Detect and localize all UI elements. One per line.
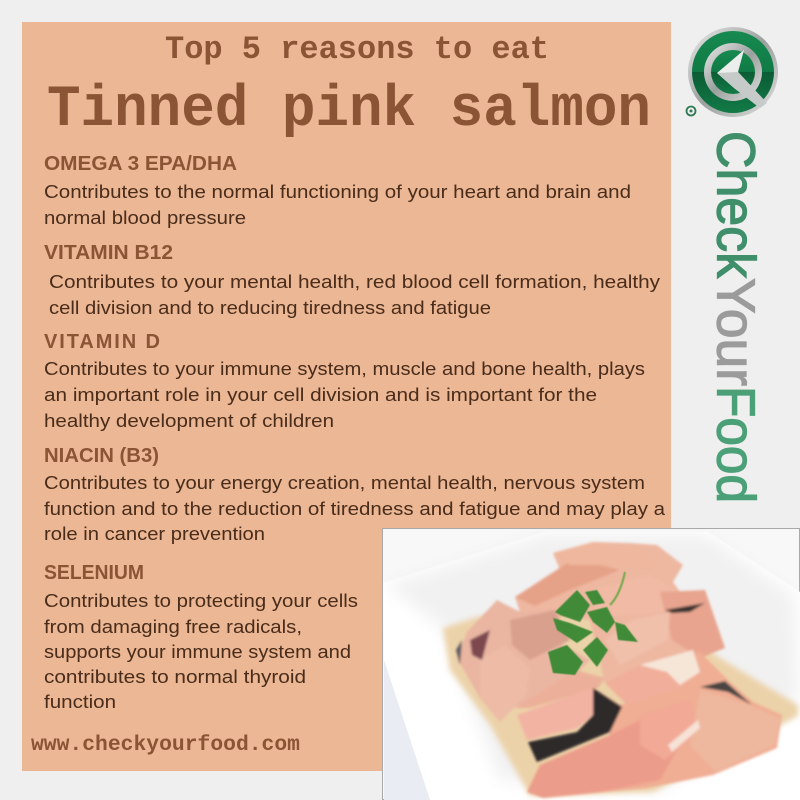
heading: vitamin d: VITAMIN D [44,331,160,353]
main title: Tinned pink salmon [47,78,651,143]
photo: tinned salmon on a white plate [382,528,800,800]
plate well shading [386,534,798,790]
text: vitamin b12 benefits: cell division and to reducing tiredness and fatigue [49,297,491,318]
parsley garnish [548,572,638,675]
subtitle: top 5 reasons: Top 5 reasons to eat [165,31,549,68]
heading: omega 3: OMEGA 3 EPA/DHA [44,153,237,175]
logo wordmark: CheckYourFood: Food [706,386,766,503]
text: selenium benefits: from damaging free radicals, [44,616,302,637]
text: selenium benefits: function [44,691,116,712]
section: omega 3 [44,153,631,228]
text: vitamin b12 benefits [49,271,661,318]
text: selenium benefits: Contributes to protecting your cells [44,590,358,611]
section: vitamin d [44,331,645,431]
heading: selenium: SELENIUM [44,562,144,584]
light centre piece [605,664,657,704]
text: omega 3 benefits: Contributes to the normal functioning of your heart and brain and [44,181,631,202]
plate rim [430,592,800,800]
section: niacin [44,445,666,544]
logo wordmark: CheckYourFood: Check [706,131,766,279]
heading: niacin: NIACIN (B3) [44,445,159,467]
bottom fillet [598,654,782,794]
text: vitamin d benefits: Contributes to your immune system, muscle and bone health, plays [44,358,645,379]
salmon flesh [456,542,782,798]
text: vitamin d benefits: healthy development of children [44,410,334,431]
heading: vitamin b12: VITAMIN B12 [44,242,173,264]
text: niacin benefits: function and to the reduction of tiredness and fatigue and may play a [44,498,666,519]
text: niacin benefits: Contributes to your energy creation, mental health, nervous system [44,472,645,493]
text: vitamin d benefits: an important role in your cell division and is important for the [44,384,597,405]
title [47,31,651,143]
text: niacin benefits: role in cancer prevention [44,523,265,544]
text: vitamin d benefits [44,358,645,431]
text: niacin benefits [44,472,666,544]
broth [443,600,798,796]
text: vitamin b12 benefits: Contributes to your mental health, red blood cell formation, healthy [49,271,661,292]
text: selenium benefits: contributes to normal thyroid [44,666,306,687]
pink cylinder [517,688,593,740]
logo wordmark: CheckYourFood [706,131,766,503]
logo wordmark: CheckYourFood: Your [706,278,766,386]
text: selenium benefits [44,590,358,712]
panel: peach background [22,22,671,771]
section: selenium [44,562,358,712]
left chunk [458,599,590,707]
website url: www.checkyourfood.com [31,734,300,757]
text: omega 3 benefits: normal blood pressure [44,207,246,228]
text: selenium benefits: supports your immune system and [44,641,351,662]
dark skin [528,688,622,762]
icon: check your food logo [686,27,778,117]
top flakes [514,540,688,682]
text: omega 3 benefits [44,181,631,228]
section: vitamin b12 [44,242,661,318]
